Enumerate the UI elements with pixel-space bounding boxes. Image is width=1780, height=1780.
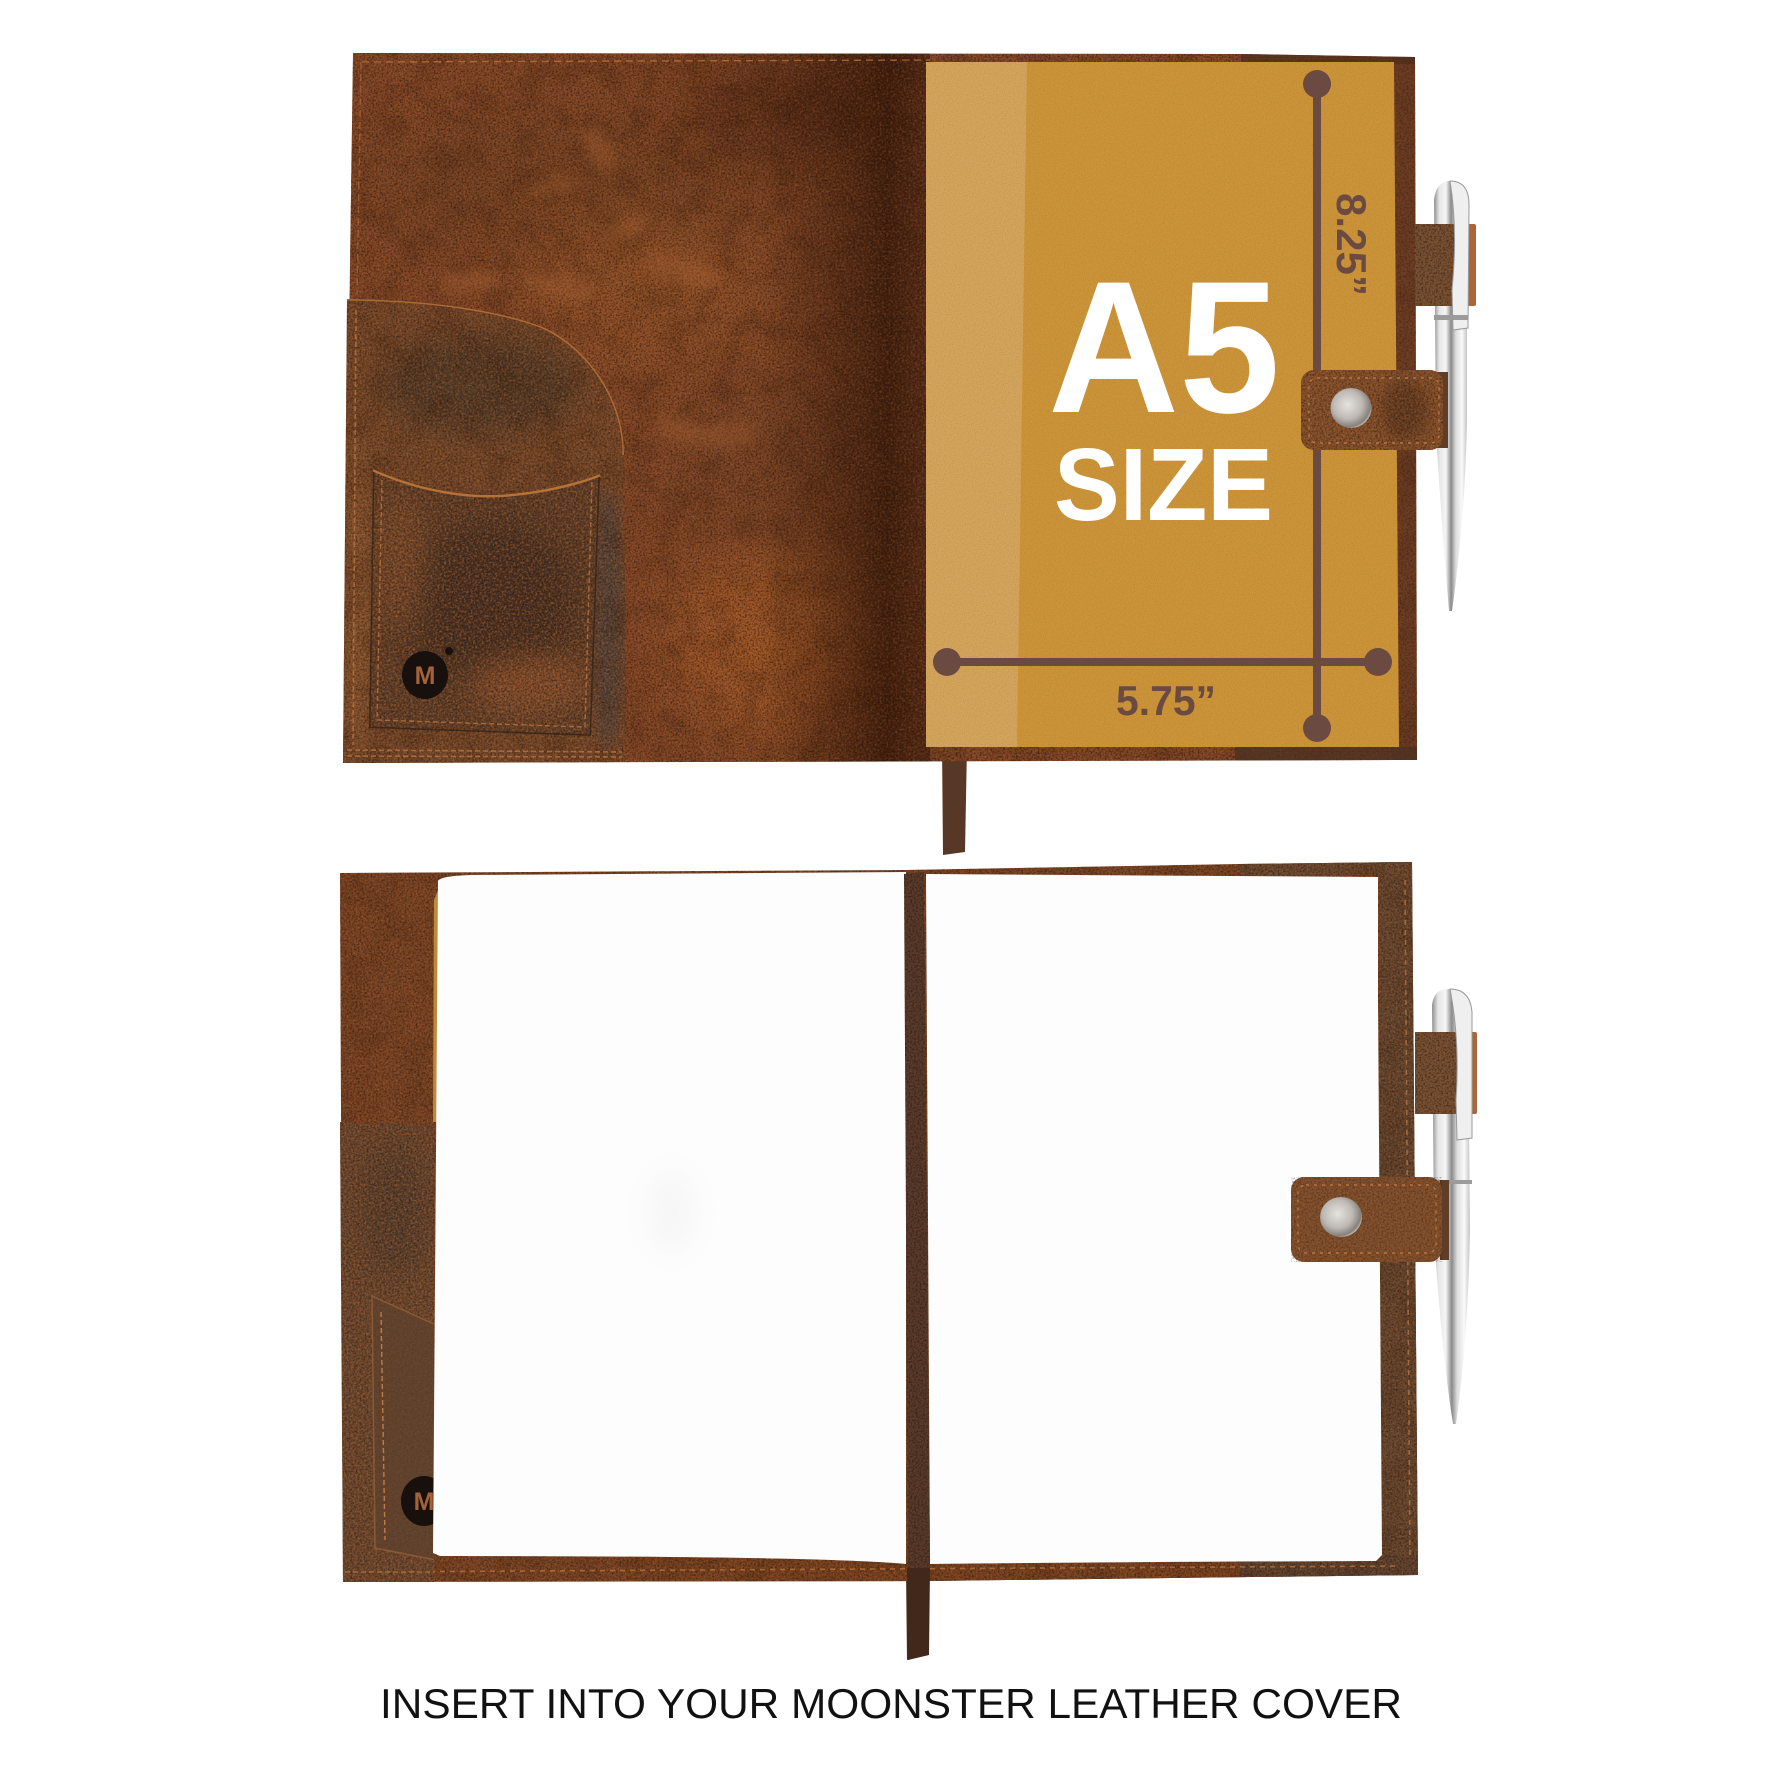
small card pocket [365, 465, 605, 740]
ribbon bookmark tail: bottom panel [906, 1570, 929, 1660]
snap strap: top panel [1301, 370, 1448, 450]
left pocket: partly hidden [338, 1120, 625, 1585]
leather cover: inner spread [340, 50, 1421, 765]
white pages [433, 872, 1382, 1564]
kraft endpaper fold strip [926, 62, 1027, 747]
large curved pocket [340, 295, 630, 765]
kraft sliver next to pages [433, 885, 440, 1122]
ribbon bookmark: top panel [942, 745, 967, 855]
panel: open leather cover with A5 insert [340, 50, 1476, 855]
caption: INSERT INTO YOUR MOONSTER LEATHER COVER [380, 1680, 1402, 1727]
width label: 5.75” [1116, 677, 1216, 724]
icon: logo partly hidden: M [414, 1488, 434, 1516]
ribbon tail over cover edge [907, 1568, 930, 1660]
dimension lines [933, 70, 1392, 742]
right edge and dark trim [1394, 64, 1417, 758]
heading: SIZE: SIZE [1054, 427, 1273, 542]
height label: 8.25” [1328, 193, 1375, 296]
icon: Moonster M logo [402, 647, 453, 699]
panel: cover with white notebook pages [335, 858, 1477, 1660]
leather cover: frame around pages [335, 858, 1425, 1588]
A5 kraft paper insert [926, 62, 1399, 747]
ribbon bookmark: across centre [900, 870, 934, 1572]
icon: metal snap button [1330, 388, 1372, 428]
snap strap: bottom panel [1291, 1177, 1449, 1262]
debossed leaf pattern [440, 123, 756, 451]
heading: A5: A5 [1048, 242, 1280, 452]
icon: Moonster M logo: M [415, 662, 435, 690]
icon: logo partly hidden [401, 1476, 447, 1526]
icon: metal snap button [1320, 1197, 1362, 1237]
stitching: cover [362, 60, 930, 62]
small card pocket: bottom panel [372, 1296, 436, 1560]
pen with leather loop: top panel [1415, 181, 1476, 611]
pen with leather loop: bottom panel [1415, 989, 1477, 1424]
